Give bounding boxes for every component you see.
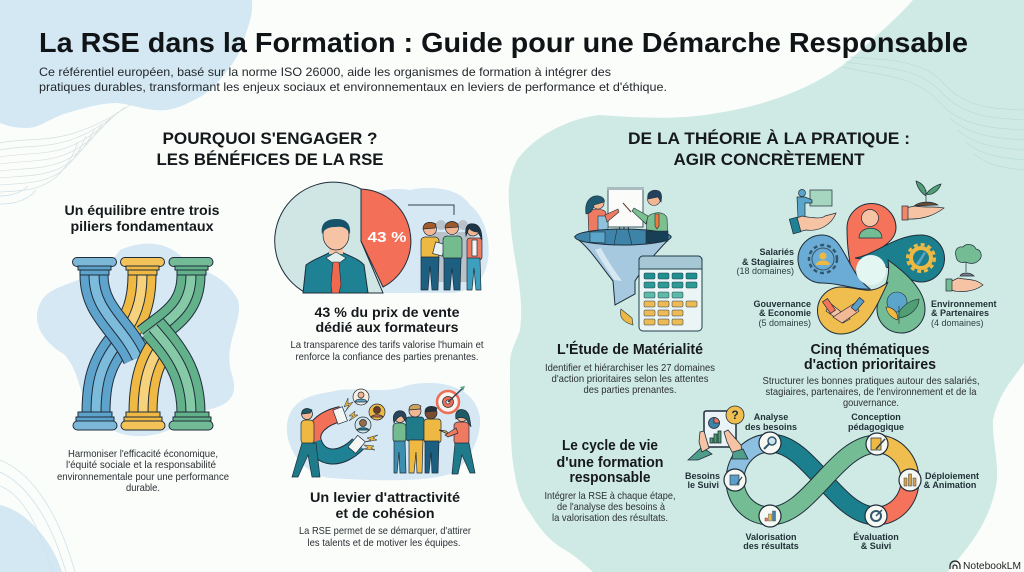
green main: [153, 328, 191, 413]
text: piliers: l'équité sociale et la responsabilité: [66, 459, 216, 471]
heading: cycle de vie: responsable: [570, 470, 650, 486]
petal: jaune: [817, 282, 888, 334]
icon: poignée de main: [823, 297, 864, 323]
label: conception: [848, 412, 904, 432]
text: 43 %: [290, 339, 484, 363]
chart: camembert 43 %: 43 %: [368, 229, 406, 246]
text: cycle de vie: Intégrer la RSE à chaque étape,: [544, 490, 676, 502]
label: environnement: Environnement: [931, 299, 997, 309]
heading: de la théorie à la pratique: [628, 129, 910, 169]
label: gouvernance: Gouvernance: [753, 299, 811, 309]
label: salariés: & Stagiaires: [742, 257, 794, 267]
label: analyse: Analyse: [754, 412, 788, 422]
label: besoins: [685, 471, 720, 490]
text: 43 %: La transparence des tarifs valorise l'humain et: [290, 339, 484, 351]
text: piliers: durable.: [126, 482, 160, 494]
text: cinq thématiques: gouvernance.: [843, 397, 899, 409]
label: analyse: des besoins: [745, 422, 797, 432]
label: gouvernance: [753, 299, 811, 328]
heading: attractivité: [310, 489, 460, 521]
label: évaluation: [853, 532, 899, 551]
label: salariés: [736, 247, 794, 276]
label: déploiement: & Animation: [924, 480, 976, 490]
icon: formulaire: [730, 475, 742, 485]
label: salariés: Salariés: [759, 247, 794, 257]
label: déploiement: [924, 471, 979, 490]
label: gouvernance: (5 domaines): [758, 318, 811, 328]
capitals and bases: [72, 258, 213, 430]
panel: étude de matérialité: [545, 187, 715, 396]
text: cycle de vie: [544, 490, 676, 524]
icon: engrenage bleu: [809, 245, 837, 273]
icon: formateur et main: [789, 190, 836, 234]
label: analyse: [745, 412, 797, 432]
heading: piliers: Un équilibre entre trois: [64, 202, 220, 218]
blue top: [94, 275, 137, 358]
icon: plante et globe: [886, 292, 919, 324]
subtitle: Ce référentiel européen, basé sur la norme ISO 26000, aide les organismes de formation à intégrer des: [39, 65, 611, 79]
label: conception: pédagogique: [848, 422, 904, 432]
heading: pourquoi s'engager: [156, 129, 384, 169]
panel: cinq thématiques: [736, 181, 997, 409]
text: cinq thématiques: Structurer les bonnes pratiques autour des salariés,: [762, 375, 980, 387]
heading: cinq thématiques: [804, 342, 936, 373]
label: besoins: le Suivi: [687, 480, 719, 490]
yellow bottom: [143, 338, 168, 413]
icon: arbre et main: [946, 245, 983, 292]
heading: de la théorie à la pratique: AGIR CONCRÈTEMENT: [674, 150, 865, 169]
icon: tablette et mains: [688, 406, 748, 460]
heading: 43 %: dédié aux formateurs: [316, 319, 459, 335]
heading: piliers: [64, 202, 220, 234]
heading: cycle de vie: d'une formation: [556, 455, 664, 471]
text: attractivité: [299, 525, 471, 549]
panel: cycle de vie: [544, 406, 979, 551]
label: évaluation: Évaluation: [853, 532, 899, 542]
label: environnement: [931, 299, 997, 328]
icon: crayon: [871, 438, 885, 450]
icon: déploiement: [904, 474, 916, 486]
text: piliers: Harmoniser l'efficacité économique,: [68, 448, 218, 460]
icon: personne: [859, 210, 882, 238]
icon: équipe: [421, 220, 482, 290]
icon: engrenage teal: [908, 244, 934, 272]
text: piliers: [57, 448, 229, 494]
heading: matérialité: L'Étude de Matérialité: [557, 341, 703, 358]
text: 43 %: renforce la confiance des parties prenantes.: [296, 351, 478, 363]
panel: trois piliers: [37, 202, 239, 494]
petal: teal: [855, 235, 944, 282]
chart: fleur à cinq pétales: [798, 203, 944, 334]
yellow top: [120, 275, 142, 338]
text: piliers: environnementale pour une performance: [57, 471, 229, 483]
heading: cycle de vie: Le cycle de vie: [562, 438, 658, 454]
heading: attractivité: et de cohésion: [336, 505, 434, 521]
label: valorisation: des résultats: [743, 541, 799, 551]
heading: 43 %: [314, 304, 460, 335]
heading: 43 %: 43 % du prix de vente: [314, 304, 460, 320]
text: cycle de vie: la valorisation des résultats.: [552, 512, 668, 524]
heading: attractivité: Un levier d'attractivité: [310, 489, 460, 505]
icon: barres: [765, 511, 776, 521]
nodes: [724, 432, 921, 527]
chart: camembert 43 %: [275, 182, 489, 293]
subtitle: pratiques durables, transformant les enjeux sociaux et environnementaux en leviers de performance et d'éthique.: [39, 80, 667, 94]
petal: bleu: [798, 235, 870, 289]
text: matérialité: [545, 362, 715, 396]
icon: cible: [871, 510, 882, 521]
label: salariés: (18 domaines): [736, 266, 794, 276]
subtitle: [39, 65, 667, 94]
heading: cinq thématiques: d'action prioritaires: [804, 357, 936, 373]
panel: 43 % formateurs: [275, 182, 489, 363]
label: valorisation: [743, 532, 799, 551]
icon: loupe: [764, 437, 776, 449]
heading: de la théorie à la pratique: DE LA THÉORIE À LA PRATIQUE :: [628, 129, 910, 148]
text: cinq thématiques: [762, 375, 980, 409]
heading: pourquoi s'engager: LES BÉNÉFICES DE LA RSE: [156, 150, 384, 169]
chart: boucle infinie: [724, 432, 921, 527]
text: attractivité: les talents et de motiver les équipes.: [308, 537, 460, 549]
label: déploiement: Déploiement: [925, 471, 979, 481]
label: besoins: Besoins: [685, 471, 720, 481]
text: cinq thématiques: stagiaires, partenaires, de l'environnement et de la: [766, 386, 977, 398]
icon: entonnoir et tableau: [575, 187, 702, 331]
text: cycle de vie: de l'analyse des besoins à: [557, 501, 665, 513]
label: évaluation: & Suivi: [861, 541, 891, 551]
icon: aimant et équipe: [287, 383, 480, 480]
heading: cinq thématiques: Cinq thématiques: [810, 342, 930, 358]
icon: pousse et main: [902, 181, 944, 220]
label: environnement: (4 domaines): [931, 318, 984, 328]
heading: piliers: piliers fondamentaux: [70, 218, 214, 234]
green top: [146, 275, 191, 338]
icon: formateur: [303, 219, 368, 293]
logo: NotebookLM: NotebookLM: [963, 560, 1021, 572]
petal: rouge: [847, 203, 896, 277]
panel: cycle de vie: ?: [731, 408, 739, 422]
label: environnement: & Partenaires: [931, 308, 989, 318]
heading: cycle de vie: [556, 438, 664, 486]
petal: vert: [877, 260, 925, 333]
icon: piliers entrelacés: [37, 244, 239, 436]
text: matérialité: des parties prenantes.: [584, 384, 676, 396]
heading: pourquoi s'engager: POURQUOI S'ENGAGER ?: [162, 129, 378, 148]
text: matérialité: Identifier et hiérarchiser les 27 domaines: [545, 362, 715, 374]
panel: attractivité: [287, 383, 480, 549]
label: conception: Conception: [851, 412, 901, 422]
title: La RSE dans la Formation : Guide pour une Démarche Responsable: [39, 27, 968, 58]
text: attractivité: La RSE permet de se démarquer, d'attirer: [299, 525, 471, 537]
label: valorisation: Valorisation: [745, 532, 797, 542]
text: matérialité: d'action prioritaires selon les attentes: [552, 373, 708, 385]
label: gouvernance: & Economie: [759, 308, 811, 318]
blue bottom: [96, 338, 122, 413]
